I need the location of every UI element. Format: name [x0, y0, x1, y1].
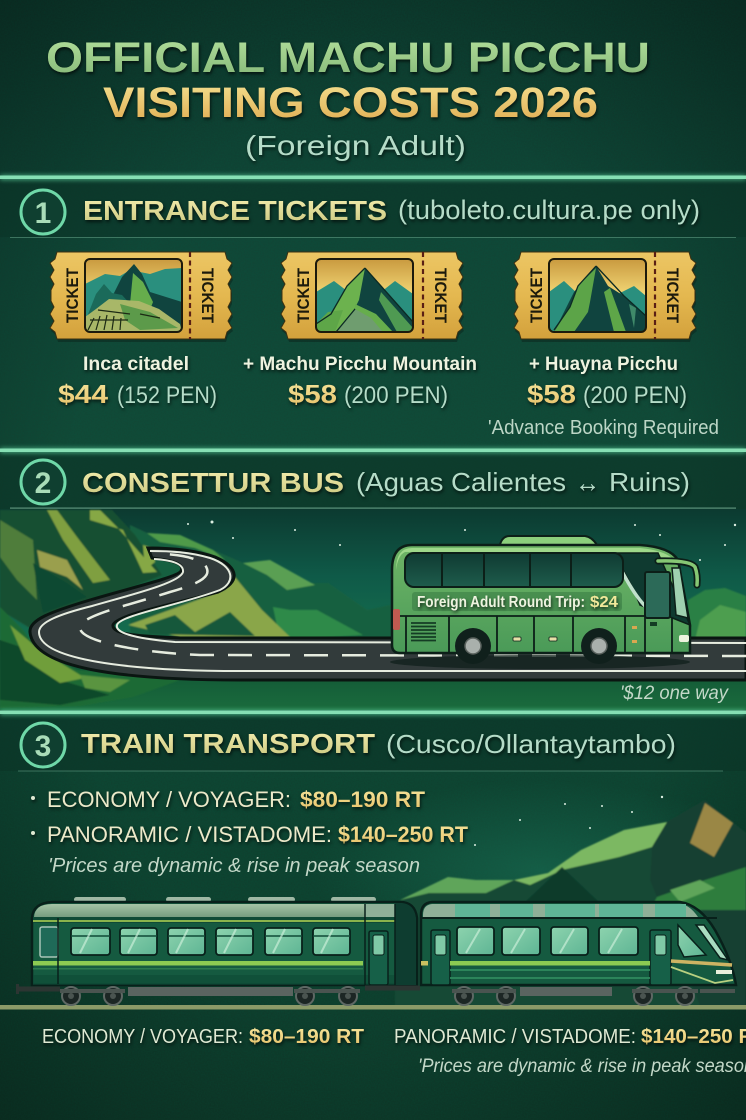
ticket label: Inca citadel: (152 PEN) — [117, 382, 217, 409]
bullet: economy price: $80–190 RT — [300, 787, 426, 812]
caption: economy price — [42, 1026, 364, 1048]
foreground hill — [0, 607, 180, 708]
title line 1: OFFICIAL MACHU PICCHU — [46, 34, 650, 82]
panel: Consettur bus — [0, 448, 746, 710]
ticket label: Inca citadel: Inca citadel — [83, 354, 189, 375]
ticket label: Machu Picchu Mountain: (200 PEN) — [344, 382, 448, 409]
icon: green tour bus — [390, 536, 697, 669]
bullet: panoramic price — [31, 822, 469, 847]
note: dynamic prices: 'Prices are dynamic & rise in peak season — [48, 855, 420, 877]
note: advance booking: 'Advance Booking Required — [488, 417, 719, 439]
heading: Consettur bus: (Aguas Calientes — [356, 467, 566, 497]
price list — [31, 787, 469, 847]
heading: Consettur bus: CONSETTUR BUS — [82, 467, 344, 498]
ticket label: Inca citadel — [58, 354, 217, 409]
ticket label: Machu Picchu Mountain: + Machu Picchu Mountain — [243, 354, 477, 375]
illustration: mountain road scene — [0, 509, 746, 710]
number badge 1: 1 — [35, 197, 51, 230]
heading: entrance tickets: (tuboleto.cultura.pe only) — [398, 195, 700, 225]
number badge 2 — [21, 460, 65, 504]
hill under road — [128, 577, 290, 637]
bullet: panoramic price: $140–250 RT — [338, 822, 469, 847]
heading: Consettur bus: Ruins) — [609, 467, 690, 497]
icon: ticket Inca citadel: TICKET — [63, 267, 82, 323]
bus label: $24 — [590, 594, 618, 611]
heading: train transport — [81, 728, 676, 759]
left cliff — [0, 510, 162, 628]
icon: ticket Huayna Picchu — [514, 252, 697, 342]
icon: panoramic train car — [421, 902, 736, 1005]
subtitle: (Foreign Adult) — [245, 130, 466, 161]
bus label: Foreign Adult Round Trip: — [417, 594, 585, 611]
icon: ticket Machu Picchu Mountain: TICKET — [431, 268, 450, 324]
heading: Consettur bus — [82, 467, 690, 498]
icon: ticket Machu Picchu Mountain — [281, 252, 464, 342]
heading: train transport: (Cusco/Ollantaytambo) — [386, 729, 676, 759]
ticket label: Machu Picchu Mountain: $58 — [288, 379, 337, 409]
heading: Consettur bus: ↔ — [575, 467, 600, 498]
bullet: economy price: ECONOMY / VOYAGER: — [47, 787, 291, 812]
icon: ticket Huayna Picchu: TICKET — [527, 267, 546, 323]
bullet: economy price — [31, 787, 426, 812]
ticket label: Huayna Picchu: (200 PEN) — [583, 382, 687, 409]
bullet: panoramic price: PANORAMIC / VISTADOME: — [47, 822, 332, 847]
heading: entrance tickets: ENTRANCE TICKETS — [83, 195, 387, 226]
caption: panoramic price: PANORAMIC / VISTADOME: — [394, 1026, 636, 1048]
ticket label: Huayna Picchu: + Huayna Picchu — [529, 354, 678, 375]
icon: ticket Huayna Picchu: TICKET — [663, 268, 682, 324]
icon: ticket Inca citadel: TICKET — [198, 268, 217, 324]
icon: economy train car — [16, 897, 420, 1005]
rail — [0, 1005, 746, 1010]
illustration: night mountains behind train — [378, 796, 746, 1005]
number badge 2: 2 — [35, 467, 51, 500]
panel: train transport — [0, 710, 746, 1077]
icon: ticket Inca citadel — [50, 252, 233, 342]
ticket label: Machu Picchu Mountain — [243, 354, 477, 409]
icon: ticket Machu Picchu Mountain: TICKET — [294, 267, 313, 323]
heading: train transport: TRAIN TRANSPORT — [81, 728, 375, 759]
caption: economy price: ECONOMY / VOYAGER: — [42, 1026, 243, 1048]
title line 2: VISITING COSTS 2026 — [103, 79, 598, 127]
panel: entrance tickets — [0, 175, 746, 439]
ticket label: Inca citadel: $44 — [58, 379, 109, 409]
caption: economy price: $80–190 RT — [249, 1026, 364, 1048]
title block — [46, 34, 650, 161]
ticket label: Huayna Picchu: $58 — [527, 379, 576, 409]
road — [30, 548, 746, 680]
heading: entrance tickets — [83, 195, 700, 226]
number badge 1 — [21, 190, 65, 234]
ticket label: Huayna Picchu — [527, 354, 687, 409]
note: one way fare: '$12 one way — [620, 683, 729, 704]
number badge 3 — [21, 723, 65, 767]
number badge 3: 3 — [35, 730, 51, 763]
far hills — [130, 525, 390, 636]
